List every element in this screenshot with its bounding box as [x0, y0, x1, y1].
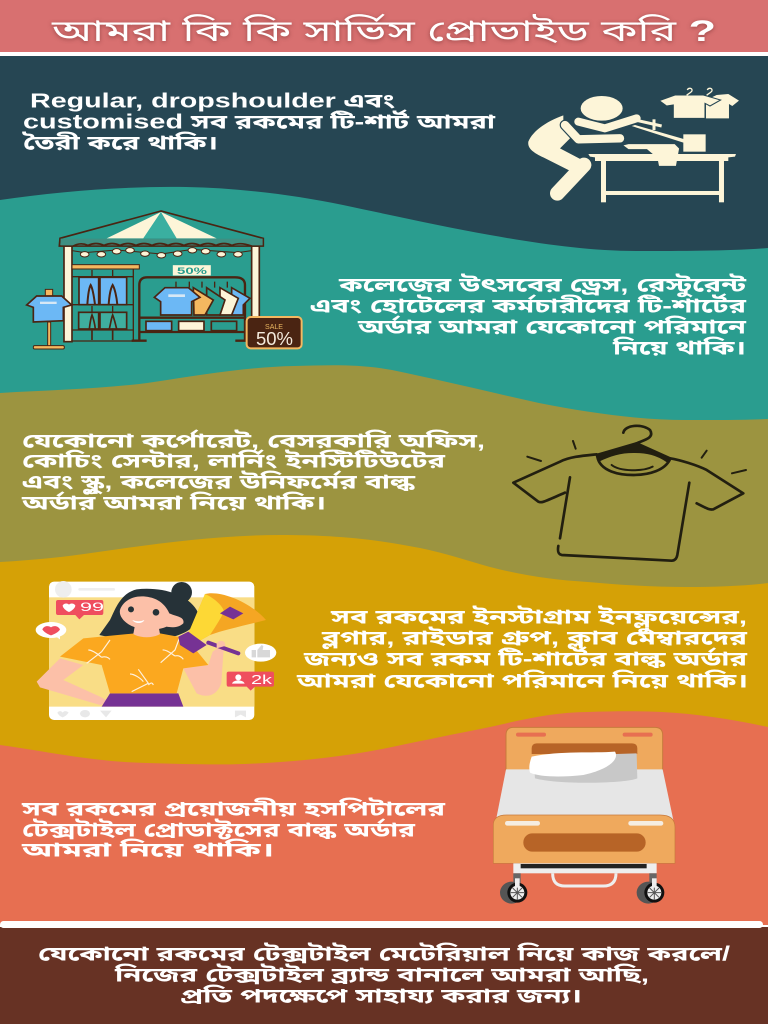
text block: college and hotel orders: নিয়ে থাকি।	[612, 336, 746, 360]
text block: influencer orders: সব রকমের ইনস্টাগ্রাম ইনফ্লুয়েন্সের,	[330, 604, 747, 633]
text block: college and hotel orders: এবং হোটেলের কর্মচারীদের টি-শার্টের	[310, 293, 747, 318]
panel: teal section	[0, 187, 768, 440]
text block: influencer orders: ব্লগার, রাইডার গ্রুপ, ক্লাব মেম্বারদের	[321, 626, 748, 650]
icon: worker at heat press	[528, 88, 739, 202]
text block: hospital textile: আমরা নিয়ে থাকি।	[20, 838, 274, 862]
counter: 99: 99	[80, 600, 105, 614]
text block: t-shirt types: তৈরী করে থাকি।	[22, 130, 218, 154]
text block: corporate uniforms: অর্ডার আমরা নিয়ে থাকি।	[21, 490, 326, 514]
panel: olive section	[0, 365, 768, 620]
counter: 2k: 2k	[251, 673, 273, 687]
text block: corporate uniforms: কোচিং সেন্টার, লার্নিং ইনস্টিটিউটের	[22, 448, 446, 472]
icon: t-shirt on hanger	[513, 426, 746, 561]
text block: t-shirt types	[22, 90, 495, 154]
text block: college and hotel orders	[310, 272, 747, 360]
text block: t-shirt types: customised সব রকমের টি-শার্ট আমরা	[23, 109, 495, 134]
text block: college and hotel orders: কলেজের উৎসবের ড্রেস, রেস্টুরেন্ট	[338, 272, 747, 297]
text block: corporate uniforms: এবং স্কুল, কলেজের উনিফর্মের বাল্ক	[22, 469, 416, 496]
footer text: নিজের টেক্সটাইল ব্র্যান্ড বানালে আমরা আছি,	[114, 962, 649, 986]
panel: header banner	[0, 0, 768, 56]
panel: dark blue tailoring section	[0, 55, 768, 275]
icon: influencer with megaphone	[36, 581, 276, 720]
text block: corporate uniforms	[21, 428, 485, 514]
icon: hospital bed	[493, 727, 675, 904]
text block: influencer orders	[296, 604, 748, 692]
text block: influencer orders: জন্যও সব রকম টি-শার্টের বাল্ক অর্ডার	[303, 646, 748, 670]
text block: hospital textile	[20, 796, 446, 862]
text block: college and hotel orders: অর্ডার আমরা যেকোনো পরিমানে	[357, 314, 747, 338]
footer text	[38, 942, 731, 1008]
text block: corporate uniforms: যেকোনো কর্পোরেট, বেসরকারি অফিস,	[22, 428, 485, 452]
sign label: 50%: 50%	[177, 266, 207, 276]
sale tag text: 50%	[256, 329, 293, 349]
sale tag text: SALE	[265, 324, 283, 331]
text block: hospital textile: সব রকমের প্রয়োজনীয় হসপিটালের	[21, 796, 446, 820]
footer text: প্রতি পদক্ষেপে সাহায্য করার জন্য।	[180, 984, 582, 1008]
text block: t-shirt types: Regular, dropshoulder এবং	[30, 90, 395, 112]
title: আমরা কি কি সার্ভিস প্রোভাইড করি ?	[51, 12, 716, 48]
panel: footer	[0, 927, 768, 1024]
panel: coral section	[0, 711, 768, 925]
divider strip	[0, 921, 763, 928]
text block: hospital textile: টেক্সটাইল প্রোডাক্টসের বাল্ক অর্ডার	[22, 817, 416, 842]
panel: gold section	[0, 535, 768, 780]
text block: influencer orders: আমরা যেকোনো পরিমানে নিয়ে থাকি।	[296, 668, 748, 692]
icon: clothing stall	[27, 211, 302, 349]
footer text: যেকোনো রকমের টেক্সটাইল মেটেরিয়াল নিয়ে কাজ করলে/	[38, 942, 731, 966]
